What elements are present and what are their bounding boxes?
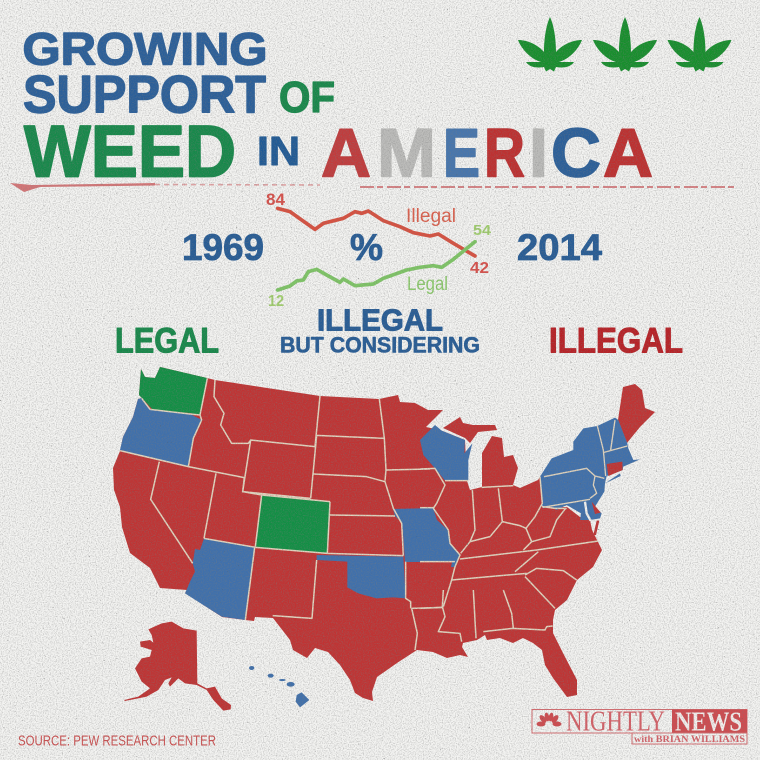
icon: peacock <box>536 712 562 726</box>
icon: leaf 1 <box>518 17 582 72</box>
icon: leaf 2 <box>593 17 657 72</box>
title line: GROWING: GROWING <box>22 24 268 74</box>
title word: AMERICA <box>321 114 653 192</box>
logo: NBC Nightly News with Brian Williams <box>532 706 747 744</box>
line chart: illegal vs legal support 1969 to 2014 <box>182 190 602 310</box>
state: Missouri (considering) <box>393 508 460 567</box>
value 12: 12 <box>268 293 284 310</box>
state: Oklahoma (considering) <box>317 555 406 598</box>
title <box>22 24 653 192</box>
state: Oregon (considering) <box>120 398 202 467</box>
state: Arizona (considering) <box>185 538 255 620</box>
legend: illegal: ILLEGAL <box>549 322 683 360</box>
series label Illegal: Illegal <box>406 206 456 227</box>
state: Michigan upper peninsula <box>443 417 497 443</box>
state: Alaska <box>124 622 231 711</box>
title word: AMERICA: R <box>484 114 525 192</box>
year label 1969: 1969 <box>182 227 264 268</box>
legend: illegal but considering: BUT CONSIDERING <box>280 332 480 358</box>
state: Delaware <box>592 502 601 514</box>
state: Wisconsin (considering) <box>420 425 472 481</box>
line: legal <box>278 242 475 290</box>
contiguous states: illegal (red) <box>113 367 602 701</box>
title word: IN: IN <box>257 128 300 174</box>
legend: illegal but considering <box>280 302 480 358</box>
title line: SUPPORT: SUPPORT <box>23 66 266 124</box>
Chesapeake Bay <box>585 502 591 521</box>
title word: WEED: WEED <box>24 112 236 192</box>
state: Washington (legal) <box>139 367 207 415</box>
icons: three cannabis leaves <box>518 17 732 72</box>
state borders: Gulf <box>412 590 553 650</box>
title word: AMERICA: I <box>529 114 548 192</box>
title word: AMERICA: A <box>603 114 653 192</box>
title word: OF: OF <box>279 73 335 122</box>
legend: legal: LEGAL <box>115 322 219 360</box>
state: Colorado (legal) <box>255 495 330 553</box>
state borders: West <box>120 378 430 620</box>
title word: AMERICA: M <box>377 114 436 192</box>
logo word: NEWS: NEWS <box>675 706 742 736</box>
value 84: 84 <box>266 190 286 209</box>
icon: leaf 3 <box>668 17 732 72</box>
state: Virginia eastern shore <box>593 521 599 535</box>
year label 2014: 2014 <box>517 227 602 268</box>
legend <box>115 302 683 360</box>
title word: AMERICA: A <box>321 114 371 192</box>
title word: AMERICA: E <box>443 114 480 192</box>
value 54: 54 <box>473 222 492 239</box>
title word: AMERICA: C <box>551 114 601 192</box>
percent sign: % <box>350 227 383 268</box>
state: Connecticut <box>607 462 623 476</box>
logo word: NIGHTLY: NIGHTLY <box>566 706 665 738</box>
map: United States by marijuana legality <box>113 367 655 711</box>
line: illegal <box>278 208 475 256</box>
states: Northeast and Mid-Atlantic (considering) <box>540 418 640 520</box>
state: Hawaii (considering) <box>249 666 309 707</box>
state borders: Northeast <box>543 420 627 507</box>
title underline rule <box>10 183 734 192</box>
value 42: 42 <box>470 260 489 277</box>
state borders: East <box>420 468 598 608</box>
source line: SOURCE: PEW RESEARCH CENTER <box>18 732 216 750</box>
state: Maine <box>618 384 655 443</box>
series label Legal: Legal <box>407 274 448 295</box>
logo byline: with BRIAN WILLIAMS <box>634 734 745 744</box>
legend: illegal but considering: ILLEGAL <box>317 302 443 338</box>
